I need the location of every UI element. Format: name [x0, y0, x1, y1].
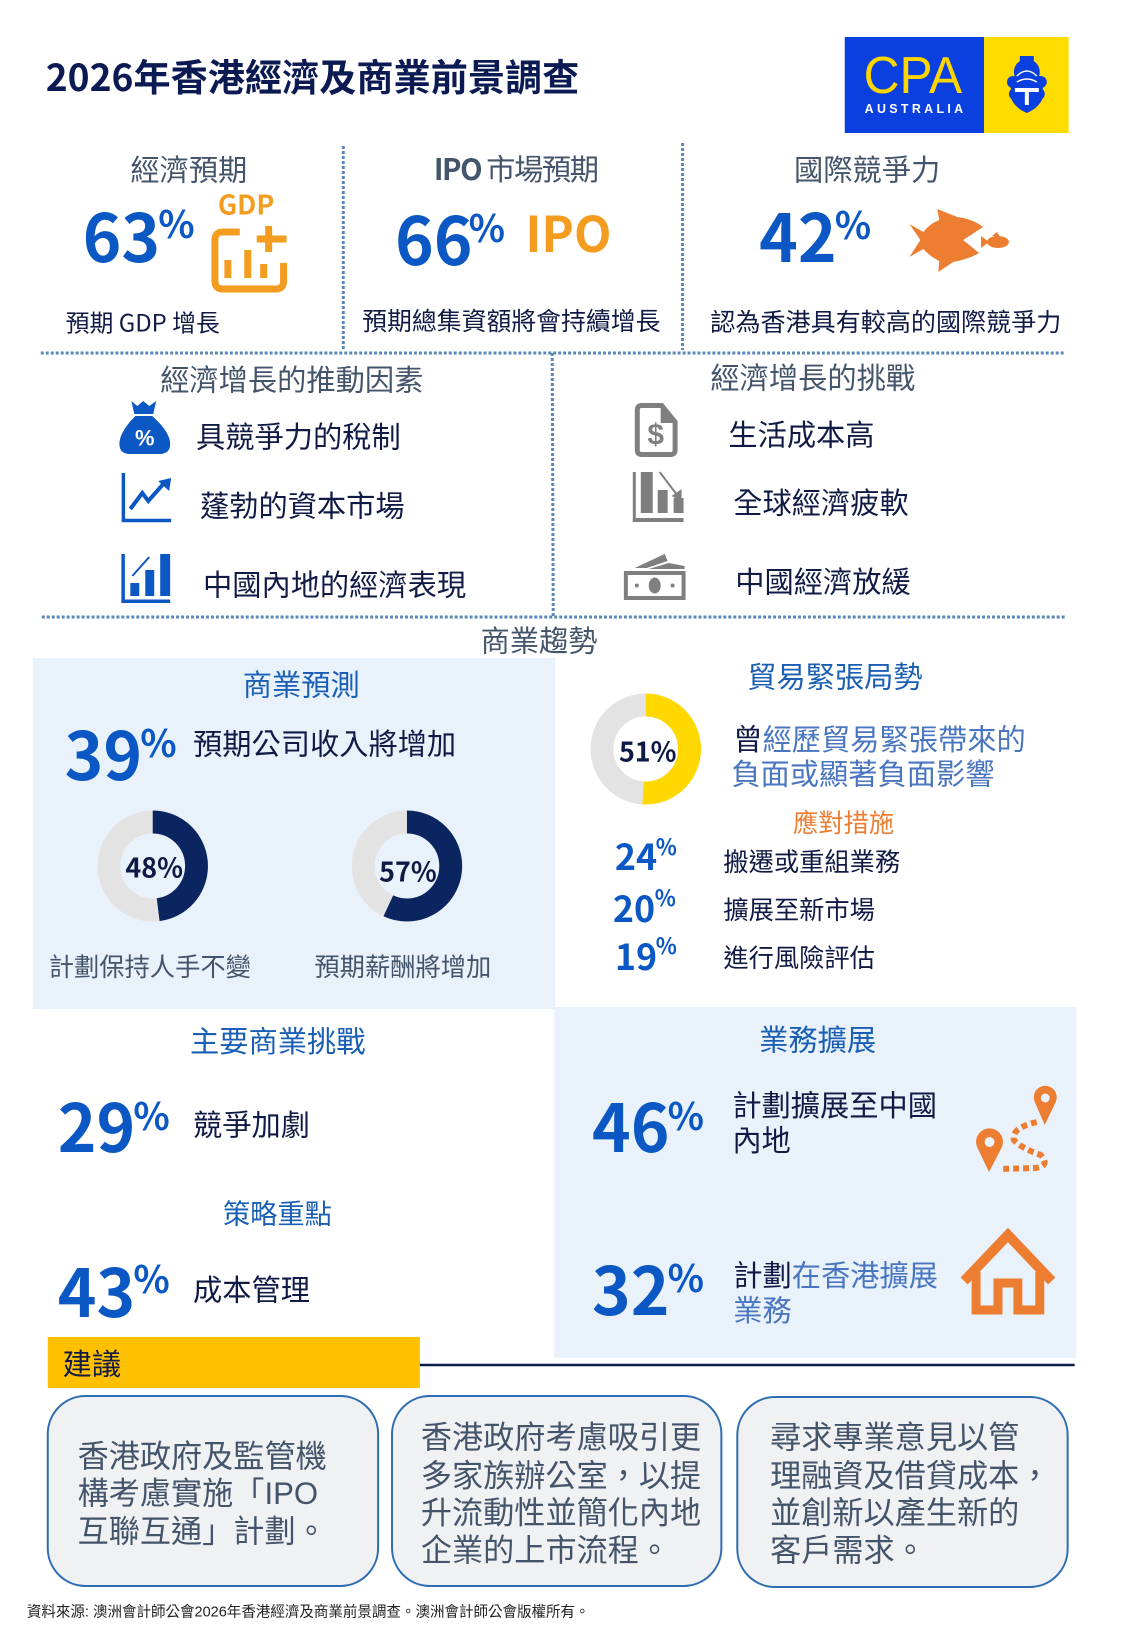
- stat: 43%: %: [133, 1249, 170, 1304]
- stat: 29%: 29: [58, 1076, 135, 1171]
- panel: strategic focus: [58, 1198, 332, 1336]
- heading: business forecast: 商業預測: [243, 669, 360, 703]
- card: recommendation 3: [737, 1397, 1068, 1587]
- band: recommendations heading: 建議: [63, 1348, 121, 1382]
- card: recommendation 2: [392, 1396, 721, 1586]
- text: trade impact: 曾: [733, 723, 763, 757]
- label: IPO: IPO: [525, 196, 611, 267]
- heading: trade tensions: 貿易緊張局勢: [747, 661, 923, 695]
- icon: money bag: %: [135, 425, 155, 451]
- text: competition: 競爭加劇: [193, 1109, 310, 1143]
- caption: GDP: 預期 GDP 增長: [66, 303, 220, 339]
- text: trade impact: 經歷貿易緊張帶來的: [763, 723, 1026, 757]
- heading: key challenges: 主要商業挑戰: [190, 1026, 365, 1059]
- response: relocate: %: [656, 831, 677, 862]
- card: recommendation 3: 客戶需求。: [770, 1532, 926, 1568]
- stat: 66%: 66: [395, 189, 473, 284]
- challenge: cost of living: 生活成本高: [728, 419, 875, 453]
- text: Hong Kong expansion: 在香港擴展: [792, 1259, 938, 1293]
- heading: business expansion: 業務擴展: [759, 1024, 876, 1058]
- donut: 48%: 48%: [125, 846, 183, 886]
- stat: 32%: %: [668, 1248, 704, 1303]
- card: recommendation 2: 香港政府考慮吸引更: [421, 1419, 701, 1455]
- challenge: China slowdown: 中國經濟放緩: [735, 566, 911, 600]
- card: recommendation 2: 企業的上市流程。: [421, 1532, 670, 1568]
- driver: mainland economy: 中國內地的經濟表現: [203, 569, 466, 603]
- stat: 63%: 63: [83, 186, 160, 281]
- icon: bar chart: [121, 554, 170, 603]
- donut: 51%: 51%: [619, 730, 677, 770]
- response: risk assessment: [615, 929, 875, 981]
- caption: salaries: 預期薪酬將增加: [314, 954, 491, 982]
- card: recommendation 3: 理融資及借貸成本，: [770, 1458, 1050, 1493]
- challenge: global economy: 全球經濟疲軟: [733, 487, 909, 521]
- card: recommendation 3: 尋求專業意見以管: [770, 1419, 1019, 1455]
- logo: CPA Australia: [845, 37, 1069, 133]
- stat: 63%: %: [158, 194, 195, 249]
- heading: strategic focus: 策略重點: [223, 1198, 332, 1230]
- stat: 29%: [58, 1076, 170, 1171]
- heading: business trends: 商業趨勢: [481, 625, 598, 659]
- icon: big fish eating small fish: [909, 209, 1009, 272]
- heading: responses: 應對措施: [793, 810, 894, 838]
- stat: 46%: 46: [592, 1076, 670, 1171]
- text: mainland expansion: 計劃擴展至中國: [732, 1089, 937, 1123]
- panel: growth drivers: [119, 364, 466, 603]
- title: 2026年香港經濟及商業前景調查: [46, 48, 579, 102]
- stat: 42%: [759, 186, 871, 281]
- icon: banknotes: [624, 554, 686, 600]
- label: GDP: GDP: [218, 183, 274, 223]
- text: trade impact: 負面或顯著負面影響: [731, 758, 994, 791]
- icon: rising line chart: [123, 473, 171, 520]
- card: recommendation 3: 並創新以產生新的: [770, 1495, 1019, 1530]
- panel: recommendations: [48, 1337, 1075, 1587]
- response: risk assessment: 進行風險評估: [723, 945, 875, 973]
- response: new markets: [613, 881, 875, 933]
- stat: 63%: [83, 186, 195, 281]
- stat: 66%: %: [469, 198, 505, 253]
- heading: economic outlook: 經濟預期: [130, 154, 247, 188]
- text: mainland expansion: 內地: [732, 1124, 791, 1158]
- response: risk assessment: %: [656, 930, 677, 961]
- stat: 39%: [65, 704, 177, 799]
- response: relocate: [615, 829, 900, 881]
- footer: source: 資料來源: 澳洲會計師公會2026年香港經濟及商業前景調查。澳洲會計師公會版權所有。: [27, 1603, 590, 1621]
- text: Hong Kong expansion: 業務: [733, 1294, 792, 1328]
- donut: 48%: [109, 822, 197, 910]
- card: recommendation 1: 互聯互通」計劃。: [78, 1513, 327, 1549]
- response: risk assessment: 19: [615, 929, 657, 981]
- icon: cost document: [637, 406, 675, 454]
- donut: 57%: 57%: [379, 850, 437, 890]
- stat: 42%: 42: [759, 186, 837, 281]
- text: Hong Kong expansion: 計劃: [733, 1259, 792, 1293]
- response: relocate: 24: [615, 829, 657, 881]
- logo: CPA Australia: AUSTRALIA: [865, 102, 963, 116]
- caption: IPO: 預期總集資額將會持續增長: [362, 308, 661, 336]
- panel: growth challenges: [624, 362, 915, 600]
- panel: business expansion: [554, 1007, 1077, 1358]
- stat: 29%: %: [133, 1086, 170, 1141]
- panel: economic outlook: [66, 154, 287, 339]
- heading: growth challenges: 經濟增長的挑戰: [710, 362, 915, 396]
- caption: headcount: 計劃保持人手不變: [49, 954, 251, 982]
- card: recommendation 1: 構考慮實施「IPO: [78, 1475, 318, 1511]
- response: new markets: %: [655, 882, 676, 913]
- driver: capital markets: 蓬勃的資本市場: [200, 490, 405, 524]
- icon: route pins: [976, 1086, 1057, 1172]
- card: recommendation 2: 升流動性並簡化內地: [421, 1495, 701, 1530]
- stat: 39%: 39: [65, 704, 142, 799]
- donut: 57%: [363, 822, 451, 910]
- donut: 51%: [602, 705, 690, 793]
- icon: falling bars: [633, 472, 684, 522]
- card: recommendation 1: 香港政府及監管機: [78, 1438, 327, 1474]
- panel: key challenges: [58, 1026, 365, 1171]
- heading: growth drivers: 經濟增長的推動因素: [160, 364, 423, 398]
- caption: competitiveness: 認為香港具有較高的國際競爭力: [710, 309, 1061, 337]
- heading: IPO outlook: IPO 市場預期: [434, 147, 599, 189]
- response: new markets: 擴展至新市場: [723, 897, 875, 925]
- text: cost management: 成本管理: [193, 1274, 310, 1308]
- icon: GDP growth chart: [215, 226, 287, 289]
- panel: trade tensions: [602, 661, 1026, 981]
- panel: IPO outlook: [362, 147, 661, 336]
- icon: cost document: $: [647, 418, 664, 452]
- response: new markets: 20: [613, 881, 655, 933]
- stat: 39%: %: [140, 713, 177, 768]
- stat: 42%: %: [835, 195, 871, 250]
- stat: 32%: [592, 1239, 704, 1334]
- driver: tax: 具競爭力的稅制: [196, 421, 401, 455]
- logo: CPA Australia: CPA: [864, 46, 963, 104]
- stat: 43%: [58, 1241, 170, 1336]
- response: relocate: 搬遷或重組業務: [723, 849, 900, 877]
- band: recommendations heading: [48, 1337, 420, 1388]
- card: recommendation 1: [48, 1396, 378, 1586]
- stat: 46%: %: [668, 1086, 704, 1141]
- text: revenue: 預期公司收入將增加: [193, 728, 456, 762]
- panel: business forecast: [33, 658, 555, 1009]
- icon: house: [964, 1235, 1052, 1310]
- card: recommendation 2: 多家族辦公室，以提: [421, 1458, 701, 1493]
- panel: international competitiveness: [710, 154, 1061, 337]
- stat: 43%: 43: [58, 1241, 135, 1336]
- heading: competitiveness: 國際競爭力: [794, 154, 940, 188]
- stat: 32%: 32: [592, 1239, 670, 1334]
- stat: 46%: [592, 1076, 704, 1171]
- icon: money bag: [119, 401, 170, 454]
